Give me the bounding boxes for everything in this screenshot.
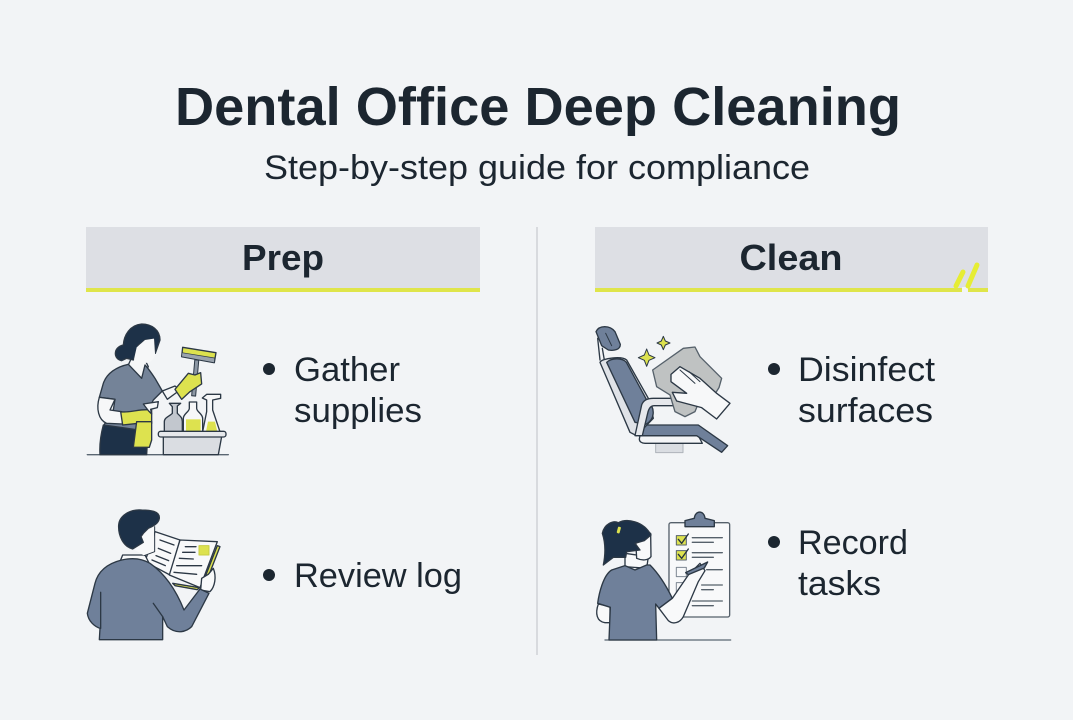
bullet: disinfect surfaces: Disinfect	[798, 351, 936, 389]
bullet: record tasks	[768, 524, 908, 603]
bullet: gather supplies: supplies	[294, 392, 422, 430]
panel: prep header: Prep	[242, 237, 324, 278]
icon: person reviewing log book	[87, 510, 220, 640]
bullet: review log: Review log	[294, 557, 462, 595]
panel: clean header: Clean	[740, 237, 842, 278]
panel: clean header	[595, 227, 988, 293]
icon: person recording tasks on clipboard	[597, 512, 731, 640]
bullet: disinfect surfaces: surfaces	[798, 392, 933, 430]
bullet: gather supplies	[263, 351, 422, 430]
bullet: disinfect surfaces	[768, 351, 936, 430]
panel: prep header	[86, 227, 480, 292]
title: Dental Office Deep Cleaning	[175, 77, 901, 137]
bullet: record tasks: tasks	[798, 565, 881, 603]
bullet: gather supplies: Gather	[294, 351, 400, 389]
icon: person gathering cleaning supplies	[87, 324, 228, 455]
bullet: record tasks: Record	[798, 524, 908, 562]
icon: wiping dental chair	[596, 327, 730, 453]
subtitle: Step-by-step guide for compliance	[264, 149, 810, 187]
